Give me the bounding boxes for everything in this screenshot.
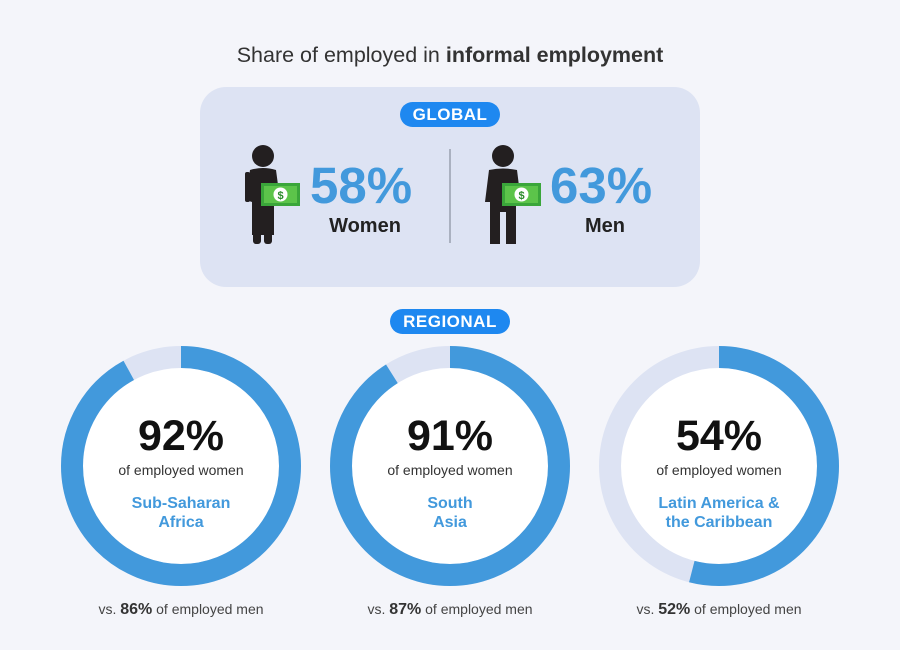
donut: South Asia [330,346,570,586]
donut: Latin America: 54% [676,412,762,460]
regional pill [390,309,510,334]
stat: men 63%: Men [585,215,625,237]
donut: Sub-Saharan Africa: Africa [158,514,204,531]
donut: Sub-Saharan Africa: Sub-Saharan [132,495,230,512]
text: men comparison 3: vs. 52% of employed men [636,601,802,618]
donut: Latin America: of employed women [656,462,782,478]
donut: South Asia: South [427,495,473,512]
stat: men 63%: 63% [550,157,652,214]
icon: man with cash [485,145,541,244]
panel: global [200,87,700,287]
donut: Sub-Saharan Africa [61,346,301,586]
icon: man with cash: $ [518,190,525,202]
donut: Latin America: Latin America & [658,495,780,512]
donut: South Asia: of employed women [387,462,513,478]
donut: Latin America [599,346,839,586]
global pill [400,102,500,127]
regional pill: REGIONAL [403,312,497,331]
donut: Sub-Saharan Africa: of employed women [118,462,244,478]
text: men comparison 2: vs. 87% of employed men [367,601,533,618]
donut: South Asia: 91% [407,412,493,460]
text: men comparison 1: vs. 86% of employed men [98,601,264,618]
donut: South Asia: Asia [433,514,467,531]
global pill: GLOBAL [413,105,487,124]
stat: women 58%: 58% [310,157,412,214]
title: Share of employed in informal employment [237,43,663,67]
donut: Latin America: the Caribbean [666,514,772,531]
donut: Sub-Saharan Africa: 92% [138,412,224,460]
stat: women 58%: Women [329,215,401,237]
icon: woman with cash [245,145,300,244]
icon: woman with cash: $ [277,190,284,202]
